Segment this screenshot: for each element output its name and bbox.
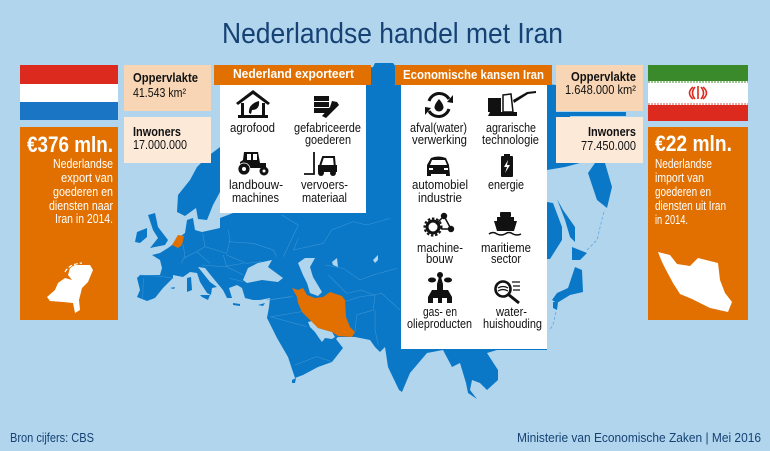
label: gas- en olieproducten: olieproducten [407,317,472,331]
icon: battery [501,154,513,177]
import description: in 2014. [655,213,688,227]
label: landbouwmachines: machines [232,191,279,205]
heading: Nederland exporteert [233,66,355,81]
map: European borders [140,230,290,300]
panel: Iranian area [556,65,643,111]
icon: ship [489,212,521,235]
export description: Iran in 2014. [55,212,113,226]
panel: Dutch area [124,65,211,111]
icon: Netherlands silhouette [47,263,93,313]
panel: Nederland exporteert [214,65,371,213]
label: landbouwmachines [229,178,283,205]
panel: Dutch population: 17.000.000 [133,138,187,152]
import description: goederen en [655,185,711,199]
label: afval(water) verwerking: afval(water) [410,121,467,135]
label: gas- en olieproducten [407,305,472,331]
panel: Economische kansen Iran [395,65,552,349]
export description: diensten naar [49,199,113,213]
icon: machinebouw [424,213,454,236]
map: Iran highlighted [292,288,355,337]
label: waterhuishouding: huishouding [483,317,542,331]
panel: Dutch area: Oppervlakte [133,71,198,85]
map: Black Sea, Caspian, gulf and other inland water [243,255,378,342]
panel: Dutch export [20,127,118,320]
icon: gas en olie [428,272,452,303]
label: landbouwmachines: landbouw- [229,178,283,192]
label: agrarische technologie: agrarische [486,121,536,135]
panel: Iranian area: Oppervlakte [571,70,636,84]
panel: Dutch population [124,117,211,163]
heading: Economische kansen Iran [403,67,544,82]
icon: gefabriceerde goederen [314,96,339,118]
label: automobiel industrie: industrie [418,191,462,205]
title: Nederlandse handel met Iran [222,18,563,50]
label: machinebouw: bouw [426,252,454,266]
label: automobiel industrie [412,178,468,205]
import description: import van [655,171,704,185]
label: vervoersmateriaal [301,178,348,205]
label: automobiel industrie: automobiel [412,178,468,192]
map: Asian borders [267,215,400,365]
label: maritieme sector: maritieme [481,241,531,255]
export description: export van [61,171,113,185]
import description [655,157,726,227]
panel: Dutch area: 41.543 km² [133,86,186,100]
panel: Iranian import [648,127,748,320]
label: agrarische technologie [482,121,539,147]
label: agrofood: agrofood [230,121,275,135]
label: afval(water) verwerking: verwerking [412,133,467,147]
export description: goederen en [53,185,113,199]
icon: car [427,156,450,176]
map: Mediterranean islands [170,277,296,383]
map: Eurasia [135,63,626,399]
icon: tractor [238,152,268,176]
label: gas- en olieproducten: gas- en [423,305,457,319]
export description: Nederlandse [53,157,113,171]
label: gefabriceerde goederen: gefabriceerde [294,121,361,135]
import description: Nederlandse [655,157,712,171]
map: Kamchatka [588,163,612,208]
panel: Iranian population [556,117,643,163]
map: Scandinavia [177,147,220,220]
label: maritieme sector: sector [491,252,521,266]
icon: afval(water) [425,93,453,117]
export description [49,157,113,226]
label: gefabriceerde goederen [294,121,361,147]
map: eastern islands [547,199,587,310]
panel: Dutch population: Inwoners [133,125,181,139]
panel: Iranian population: Inwoners [588,125,636,139]
flag: Iran [648,65,748,121]
export value: €376 mln. [27,132,113,157]
panel: Iranian area: 1.648.000 km² [565,83,636,97]
label: vervoersmateriaal: vervoers- [301,178,348,192]
label: maritieme sector [481,241,531,266]
icon: waterhuishouding [496,282,520,303]
source: Bron cijfers: CBS [10,430,94,445]
flag: Netherlands [20,65,118,120]
label: gefabriceerde goederen: goederen [305,133,351,147]
icon: agrofood [236,90,270,118]
map: Netherlands highlighted [172,235,184,248]
label: vervoersmateriaal: materiaal [302,191,347,205]
icon: Iran silhouette [658,252,732,312]
label: energie: energie [488,178,524,192]
icon: forklift [304,152,337,176]
map: Kuril and Ryukyu chains [549,210,605,331]
map: British Isles [135,213,168,248]
label: waterhuishouding [483,305,542,331]
label: waterhuishouding: water- [495,305,527,319]
icon: agrarische technologie [488,91,536,116]
import value: €22 mln. [655,131,732,156]
label: machinebouw: machine- [417,241,463,255]
panel: Iranian population: 77.450.000 [581,139,636,153]
label: machinebouw [417,241,463,266]
label: afval(water) verwerking [410,121,467,147]
icon: Iranian emblem [690,86,706,99]
import description: diensten uit Iran [655,199,726,213]
label: agrarische technologie: technologie [482,133,539,147]
